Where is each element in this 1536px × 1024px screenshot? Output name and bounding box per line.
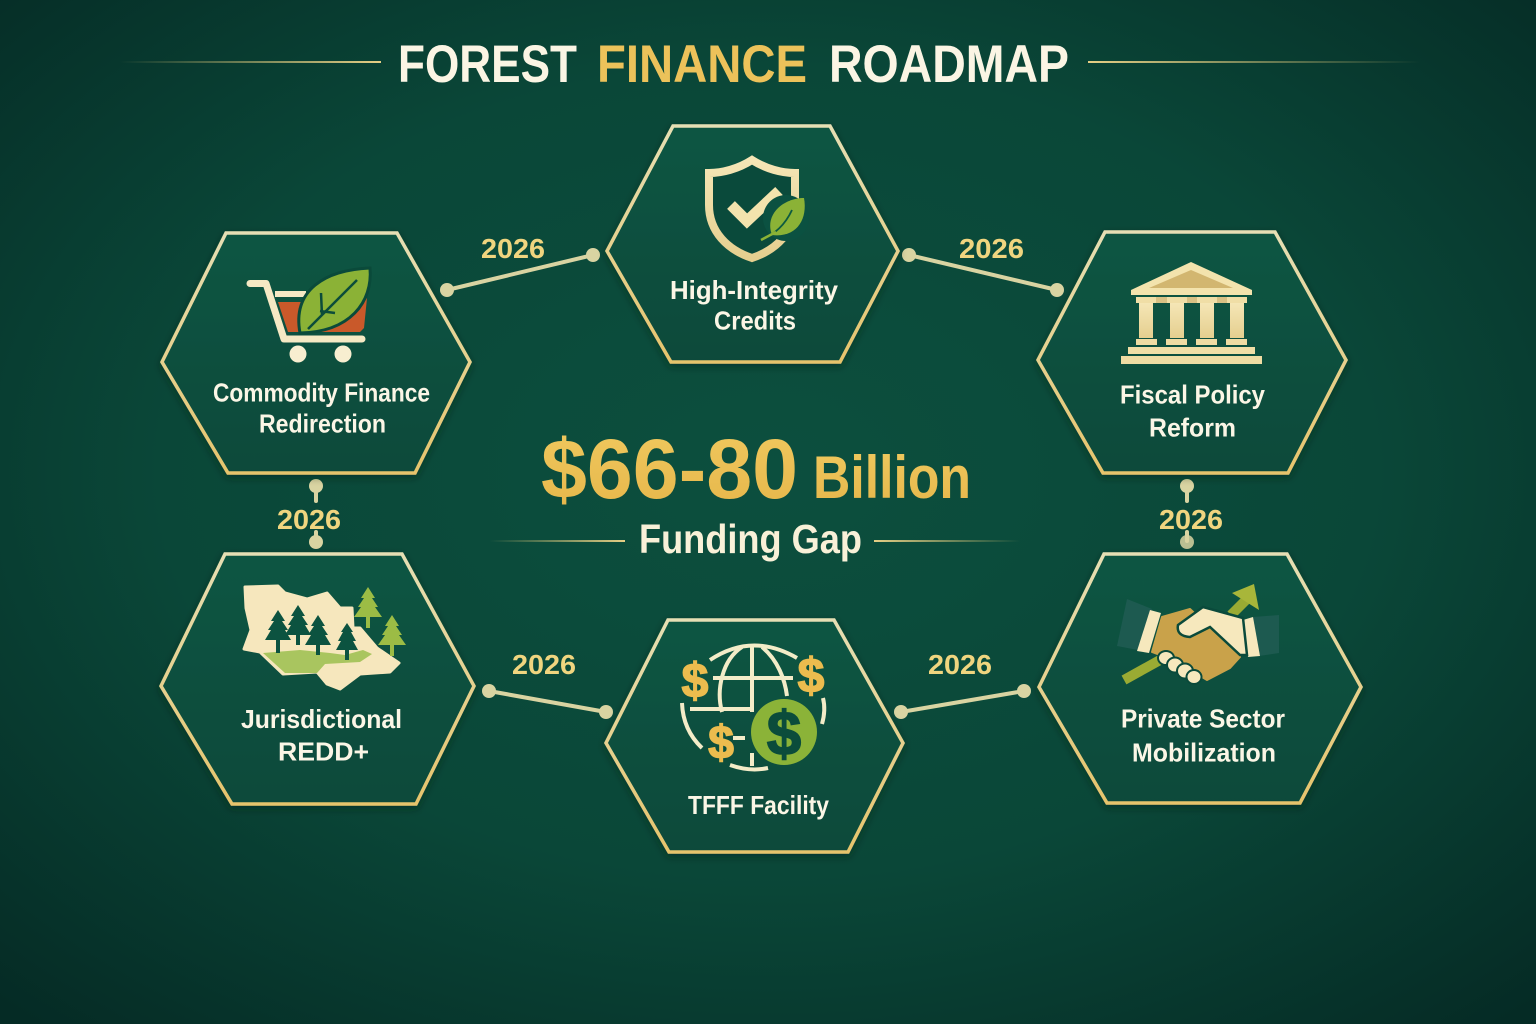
- panel: fiscal policy reform: [1038, 232, 1346, 473]
- icon: handshake with arrow: [1117, 584, 1279, 684]
- connector: jurisdictional to tfff: [482, 649, 613, 719]
- connector: jurisdictional to tfff: 2026: [512, 649, 576, 680]
- center callout: funding gap: $66-80: [541, 422, 798, 516]
- connector: commodity to jurisdictional: 2026: [277, 504, 341, 535]
- label: [213, 378, 430, 438]
- connector: tfff to private sector: [894, 649, 1031, 719]
- icon: shield with check and leaf: [709, 160, 809, 258]
- icon: globe with dollar signs: [682, 645, 825, 769]
- icon: globe with dollar signs: $: [767, 700, 801, 769]
- icon: shopping cart with leaf: [250, 268, 370, 362]
- connector: fiscal to private sector: 2026: [1159, 504, 1223, 535]
- center callout: funding gap: Billion: [813, 444, 971, 511]
- panel: jurisdictional redd+: [161, 554, 474, 804]
- icon: globe with dollar signs: $: [682, 655, 709, 708]
- label: Jurisdictional: [241, 704, 402, 734]
- connector: credits to fiscal: 2026: [959, 233, 1024, 264]
- panel: private sector mobilization: [1039, 554, 1361, 803]
- title: FINANCE: [597, 35, 807, 94]
- connector: credits to fiscal: [902, 233, 1064, 297]
- label: Fiscal Policy: [1120, 380, 1265, 410]
- label: Mobilization: [1132, 738, 1276, 768]
- label: [670, 275, 839, 336]
- label: Redirection: [259, 408, 386, 438]
- connector: commodity to credits: [440, 233, 600, 297]
- title: [120, 35, 1420, 94]
- title: ROADMAP: [829, 35, 1069, 94]
- label: High-Integrity: [670, 275, 839, 305]
- panel: tfff facility: [606, 620, 903, 852]
- label: REDD+: [278, 736, 369, 766]
- label: Private Sector: [1121, 704, 1285, 734]
- center callout: funding gap: Funding Gap: [639, 516, 862, 562]
- label: Commodity Finance: [213, 378, 430, 408]
- title: FOREST: [398, 35, 577, 94]
- panel: commodity finance redirection: [162, 233, 470, 473]
- label: Reform: [1149, 412, 1236, 442]
- label: TFFF Facility: [688, 790, 829, 820]
- center callout: funding gap: [490, 422, 1020, 562]
- connector: commodity to credits: 2026: [481, 233, 545, 264]
- connector: tfff to private sector: 2026: [928, 649, 992, 680]
- connector: commodity to jurisdictional: [277, 479, 341, 549]
- connector: fiscal to private sector: [1159, 479, 1223, 549]
- icon: classical bank building: [1121, 262, 1262, 364]
- panel: high-integrity credits: [607, 126, 898, 362]
- label: [1121, 704, 1285, 768]
- icon: globe with dollar signs: $: [708, 716, 734, 768]
- icon: globe with dollar signs: $: [798, 650, 825, 703]
- label: Credits: [714, 306, 796, 336]
- icon: map with trees: [244, 586, 406, 689]
- label: [1120, 380, 1265, 442]
- label: [241, 704, 402, 766]
